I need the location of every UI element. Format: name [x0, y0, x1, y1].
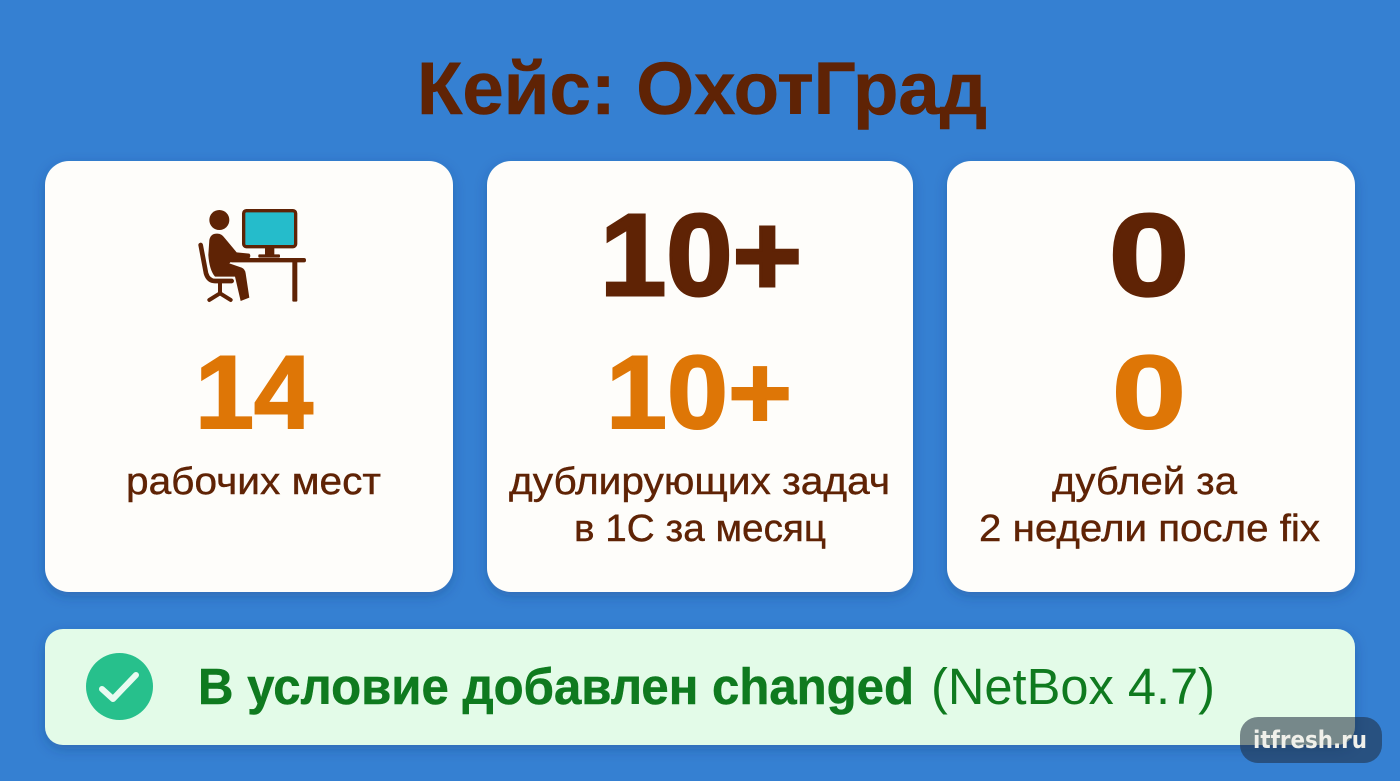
- stat label: [509, 461, 890, 550]
- stat label: [979, 461, 1320, 550]
- stat: 10+: 10+: [606, 335, 792, 451]
- stat: 14: 14: [195, 335, 313, 451]
- stat label: рабочих мест: [126, 461, 381, 503]
- title: Кейс: ОхотГрад: [417, 47, 987, 130]
- watermark: [1240, 717, 1382, 763]
- stat label: дублей за: [1052, 461, 1238, 503]
- stat label: дублирующих задач: [509, 461, 890, 503]
- stat label: в 1С за месяц: [574, 508, 826, 550]
- big number: 0: 0: [1109, 190, 1189, 320]
- icon: check mark: [86, 653, 153, 720]
- stat label: 2 недели после fix: [979, 508, 1320, 550]
- banner: condition added: [45, 629, 1355, 745]
- big number: 10+: 10+: [600, 190, 802, 320]
- stat: 0: 0: [1112, 335, 1186, 451]
- panel: workstations: [45, 161, 453, 592]
- panel: zero duplicates: [947, 161, 1355, 592]
- panel: duplicate tasks: [487, 161, 913, 592]
- icon: person at computer: [201, 210, 306, 302]
- watermark: itfresh.ru: [1253, 726, 1367, 754]
- banner text: В условие добавлен changed: [198, 658, 914, 715]
- banner text: (NetBox 4.7): [931, 658, 1215, 715]
